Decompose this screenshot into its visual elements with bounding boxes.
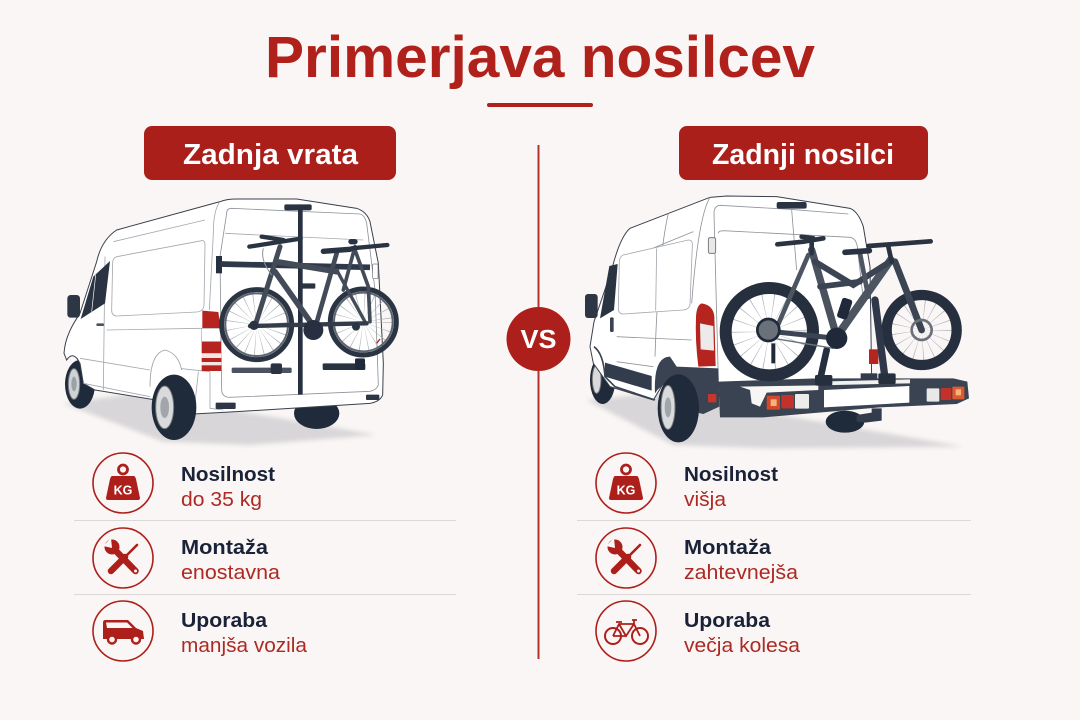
icon: weight: KG bbox=[617, 484, 635, 498]
feature row: Nosilnost bbox=[93, 453, 275, 513]
text: Montaža zahtevnejša bbox=[684, 537, 799, 584]
panel: Zadnji nosilci bbox=[577, 126, 971, 661]
text: Nosilnost višja: višja bbox=[684, 488, 727, 511]
heading badge: Zadnja vrata bbox=[144, 126, 396, 180]
icon: weight bbox=[93, 453, 153, 513]
text: Uporaba večja kolesa bbox=[684, 610, 801, 657]
illustration: van with door-mounted bike carrier bbox=[63, 199, 396, 445]
feature row: Uporaba bbox=[596, 601, 801, 661]
text: Montaža zahtevnejša: zahtevnejša bbox=[684, 561, 799, 584]
text: Nosilnost višja: Nosilnost bbox=[684, 464, 778, 486]
illustration: van with hitch-mounted bike rack bbox=[585, 196, 969, 448]
icon: van bbox=[93, 601, 153, 661]
text: Nosilnost do 35 kg: do 35 kg bbox=[181, 488, 262, 511]
feature row: Uporaba bbox=[93, 601, 308, 661]
VS badge: VS bbox=[520, 324, 556, 354]
feature row: Montaža bbox=[596, 528, 799, 588]
text: Uporaba manjša vozila: Uporaba bbox=[181, 610, 268, 632]
icon: weight: KG bbox=[114, 484, 132, 498]
icon: weight bbox=[596, 453, 656, 513]
text: Nosilnost višja bbox=[684, 464, 778, 511]
text: Uporaba manjša vozila: manjša vozila bbox=[181, 634, 308, 657]
text: Nosilnost do 35 kg bbox=[181, 464, 275, 511]
feature row: Montaža bbox=[93, 528, 281, 588]
heading badge: Zadnji nosilci bbox=[679, 126, 928, 180]
text: Uporaba manjša vozila bbox=[181, 610, 308, 657]
text: Montaža enostavna: Montaža bbox=[181, 537, 269, 559]
icon: wrench and screwdriver bbox=[596, 528, 656, 588]
text: Uporaba večja kolesa: večja kolesa bbox=[684, 634, 801, 657]
text: Montaža enostavna: enostavna bbox=[181, 561, 281, 584]
icon: wrench and screwdriver bbox=[93, 528, 153, 588]
icon: bicycle bbox=[596, 601, 656, 661]
VS badge bbox=[506, 307, 570, 371]
heading badge: Zadnji nosilci: Zadnji nosilci bbox=[712, 139, 894, 171]
title: Primerjava nosilcev bbox=[265, 25, 815, 90]
center divider line bbox=[538, 145, 540, 659]
text: Montaža enostavna bbox=[181, 537, 281, 584]
heading badge: Zadnja vrata: Zadnja vrata bbox=[183, 139, 359, 171]
feature row: Nosilnost bbox=[596, 453, 778, 513]
text: Nosilnost do 35 kg: Nosilnost bbox=[181, 464, 275, 486]
panel: Zadnja vrata bbox=[63, 126, 456, 661]
text: Uporaba večja kolesa: Uporaba bbox=[684, 610, 771, 632]
text: Montaža zahtevnejša: Montaža bbox=[684, 537, 772, 559]
